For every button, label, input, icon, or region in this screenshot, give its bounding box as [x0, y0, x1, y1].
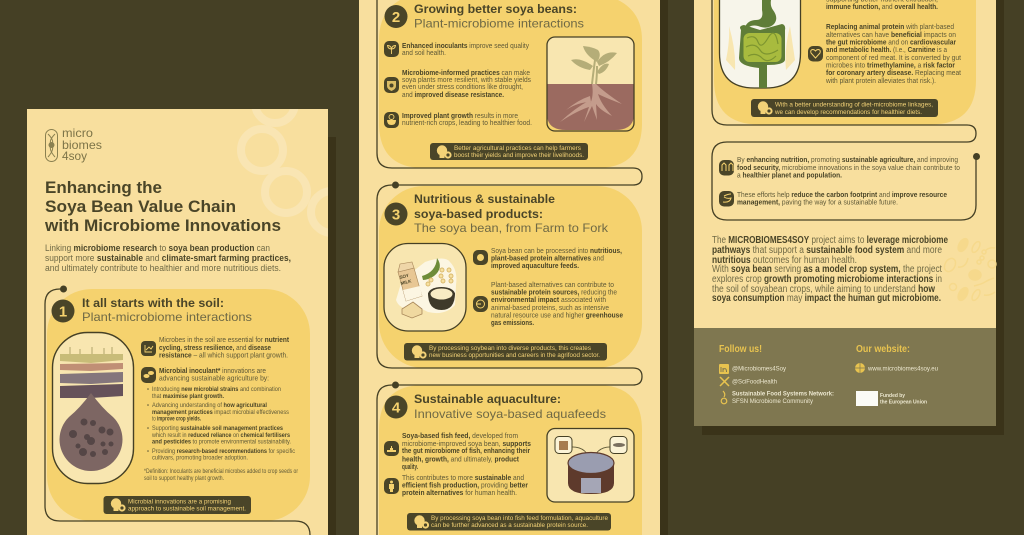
bullet list: Providing research-based recommendations for specific: [152, 448, 295, 455]
section 1 heading: It all starts with the soil:: [82, 296, 224, 310]
section 2 text: and soil health.: [402, 48, 446, 57]
section 3 heading: The soya bean, from Farm to Fork: [414, 221, 609, 235]
conclusion text: management, paving the way for a sustainable future.: [737, 198, 898, 206]
section 5 text: the gut microbiome and on cardiovascular: [826, 38, 956, 46]
section 3 text: [491, 246, 623, 327]
title: Enhancing the: [45, 178, 162, 197]
network text: Sustainable Food Systems Network:: [732, 390, 834, 398]
logo: biomes: [62, 138, 102, 152]
title: with Microbiome Innovations: [44, 216, 281, 235]
icon: knot: [721, 391, 727, 404]
section 3 text: animal-based proteins, such as intensive: [491, 303, 609, 312]
icon: linkedin: [719, 364, 729, 374]
section 2 text: Enhanced inoculants improve seed quality: [402, 41, 529, 50]
section 2 text: and improved disease resistance.: [402, 90, 504, 99]
section 3 text: plant-based protein alternatives and: [491, 254, 604, 262]
section 1 text: Microbial inoculant* innovations are: [159, 366, 266, 375]
image: soy products: [384, 244, 466, 331]
callout 5: we can develop recommendations for healthier diets.: [774, 109, 922, 116]
image: fish tank: [547, 428, 634, 502]
project description: explores crop growth promoting microbiome interactions in: [712, 274, 942, 285]
callout 1: [104, 496, 251, 514]
section 2 text: even under stress conditions like drought,: [402, 82, 523, 91]
section 1 heading: Plant-microbiome interactions: [82, 310, 252, 324]
section 2 text: Improved plant growth results in more: [402, 111, 518, 120]
x handle: @SciFoodHealth: [732, 378, 777, 386]
network text: SFSN Microbiome Community: [732, 398, 814, 405]
footnote: *Definition: Inoculants are beneficial microbes added to crop seeds or: [144, 469, 298, 475]
section 3 heading: soya-based products:: [414, 207, 543, 221]
section 2 text: [402, 41, 532, 127]
section 2 text: soya plants more resilient, with stable yields: [402, 75, 531, 84]
bullet list: Advancing understanding of how agricultural: [152, 402, 267, 409]
logo: 4soy: [62, 149, 87, 163]
badge 1: [52, 300, 74, 322]
callout 2: Better agricultural practices can help farmers: [454, 145, 582, 152]
panel: left poster: [27, 109, 328, 535]
section 4 text: the gut microbiome of fish, enhancing their: [402, 446, 530, 455]
project description: soya consumption may impact the human gut microbiome.: [712, 293, 941, 304]
panel: middle poster: [359, 0, 660, 535]
section 3 text: improved aquaculture feeds.: [491, 261, 579, 270]
section 3 text: gas emissions.: [491, 318, 534, 327]
funding text: Funded by: [880, 393, 905, 399]
callout 2: boost their yields and improve their livelihoods.: [454, 152, 584, 159]
badge 1: 1: [59, 304, 67, 320]
conclusion text: These efforts help reduce the carbon footprint and improve resource: [737, 190, 947, 199]
callout 5: [751, 99, 938, 117]
title: [44, 178, 281, 235]
section 3 heading: Nutritious & sustainable: [414, 192, 555, 206]
section 4 text: quality.: [402, 462, 418, 471]
section 3 text: environmental impact associated with: [491, 295, 606, 304]
section 5 text: with plant protein alleviates that risk.).: [825, 76, 936, 85]
project description: the soil of soyabean crops, while aiming to understand how: [712, 284, 935, 295]
icons conclusion: [719, 160, 734, 206]
section 2 text: nutrient-rich crops, leading to healthier food.: [402, 118, 532, 127]
section 3 text: natural resource use and higher greenhouse: [491, 310, 623, 320]
section 5 text: [825, 0, 962, 85]
section 5 blob: [714, 0, 976, 124]
callout 3: [404, 343, 607, 360]
section 1 text: [159, 335, 289, 382]
callout 3: By processing soybean into diverse products, this creates: [429, 345, 592, 352]
project description: The MICROBIOMES4SOY project aims to leverage microbiome: [712, 235, 948, 246]
image: soya plant: [547, 37, 634, 131]
section 5 text: component of red meat. It is converted by gut: [826, 53, 962, 62]
badge 3: [384, 202, 408, 226]
icon: chart: [141, 341, 156, 356]
title: Soya Bean Value Chain: [45, 197, 236, 216]
section 3 text: sustainable protein sources, reducing the: [491, 288, 617, 296]
section 5 text: and metabolic health. (I.e., Carnitine is a: [826, 45, 948, 54]
intro text: [45, 243, 291, 274]
section 1 heading: [82, 296, 252, 324]
panel: right poster: [694, 0, 996, 426]
section 4 text: health, growth, and ultimately, product: [402, 454, 519, 464]
callout 1: Microbial innovations are a promising: [128, 498, 231, 506]
bullet list: and pesticides to promote environmental sustainability.: [152, 438, 291, 446]
footer band: [694, 328, 996, 426]
network text: [732, 390, 834, 405]
bullet list: which result in reduced reliance on chemical fertilisers: [151, 432, 290, 439]
section 2 heading: [414, 2, 584, 30]
bullet list: Introducing new microbial strains and combination: [152, 386, 281, 393]
bullet list: [147, 386, 295, 462]
badge 2: [384, 5, 408, 28]
section 3 text: Soya bean can be processed into nutritious,: [491, 246, 622, 255]
project description: [712, 235, 948, 304]
EU flag: [856, 391, 878, 406]
section 5 text: for coronary artery disease. Replacing meat: [826, 68, 962, 77]
image: soy products: MILK: [400, 278, 413, 286]
funding text: the European Union: [880, 400, 927, 406]
section blobs: [379, 0, 642, 535]
icons section 4: [384, 441, 399, 494]
section 4 text: [402, 431, 531, 497]
connector line 1: [45, 286, 310, 535]
section 5 text: immune function, and overall health.: [826, 2, 938, 11]
badge 3: 3: [392, 206, 400, 224]
badge 4: 4: [392, 400, 401, 416]
intro text: support more sustainable and climate-smart farming practices,: [45, 253, 291, 264]
section 1 text: cycling, stress resilience, and disease: [159, 343, 271, 352]
logo: micro: [62, 126, 93, 140]
bullet list: management practices impact microbial effectiveness: [152, 409, 289, 416]
section 1 text: advancing sustainable agriculture by:: [159, 374, 269, 382]
intro text: Linking microbiome research to soya bean production can: [45, 243, 270, 254]
section 5 text: microbes into trimethylamine, a risk factor: [826, 60, 955, 70]
section 2 heading: Growing better soya beans:: [414, 2, 577, 16]
funding text: [880, 393, 927, 406]
follow us heading: Follow us!: [719, 343, 762, 355]
badge 4: [384, 396, 408, 418]
image: soil capsule: [52, 332, 134, 484]
section 4 text: This contributes to more sustainable and: [402, 473, 524, 482]
conclusion text: [737, 155, 960, 206]
conclusion text: a healthier planet and population.: [737, 170, 842, 180]
section 1 text: Microbes in the soil are essential for nutrient: [159, 335, 289, 344]
image: gut: [720, 0, 800, 88]
bullet list: that maximise plant growth.: [152, 393, 224, 400]
section 3 heading: [414, 192, 609, 235]
website url: www.microbiomes4soy.eu: [867, 366, 938, 372]
panel shadows: [328, 0, 1004, 535]
callout 3: new business opportunities and careers in the agrifood sector.: [429, 352, 600, 359]
project description: With soya bean serving as a model crop system, the project: [712, 264, 942, 275]
linkedin handle: @Microbiomes4Soy: [732, 366, 787, 372]
bullet list: cultivars, promoting broader adoption.: [152, 454, 248, 462]
icon: globe: [855, 363, 865, 373]
conclusion text: food security, microbiome innovations in the soya value chain contribute to: [737, 163, 960, 172]
callout 2: [430, 143, 588, 160]
section 5 text: Replacing animal protein with plant-based: [826, 22, 954, 31]
project description: pathways that support a sustainable food system and more: [712, 245, 942, 256]
project description: nutritious outcomes for human health.: [712, 255, 857, 266]
conclusion text: By enhancing nutrition, promoting sustainable agriculture, and improving: [737, 155, 958, 164]
callout 5: With a better understanding of diet-microbiome linkages,: [775, 102, 933, 108]
section 1 text: resistance – all which support plant growth.: [159, 350, 288, 360]
image: soy products: SOY: [399, 273, 409, 280]
icon: heart: [808, 46, 823, 62]
badge 2: 2: [392, 9, 400, 26]
callout 4: [407, 513, 611, 530]
footnote: [144, 469, 298, 482]
section 2 heading: Plant-microbiome interactions: [414, 16, 584, 30]
section 4 heading: [414, 392, 606, 421]
section 1 blob: [47, 289, 310, 521]
section 5 text: alternatives can have beneficial impacts on: [826, 30, 956, 39]
section 3 text: Plant-based alternatives can contribute to: [491, 280, 614, 289]
section 4 heading: Sustainable aquaculture:: [414, 392, 561, 406]
website heading: Our website:: [856, 343, 910, 355]
callout 4: can be further advanced as a sustainable protein source.: [431, 522, 588, 529]
decorative rings: [237, 109, 328, 236]
footnote: soil to support healthy plant growth.: [144, 476, 224, 482]
bullet list: Supporting sustainable soil management practices: [152, 425, 283, 432]
section 4 text: microbiome-improved soya bean, supports: [402, 439, 531, 448]
callout 1: approach to sustainable soil management.: [128, 506, 246, 512]
decorative microbes: [942, 237, 996, 302]
section 4 heading: Innovative soya-based aquafeeds: [414, 407, 606, 421]
icons section 2: [384, 41, 399, 128]
logo: [46, 126, 102, 163]
section 4 text: efficient fish production, providing better: [402, 480, 528, 490]
section 4 text: Soya-based fish feed, developed from: [402, 431, 518, 440]
callout 4: By processing soya bean into fish feed formulation, aquaculture: [431, 515, 608, 522]
bullet list: to improve crop yields.: [152, 416, 201, 422]
intro text: and ultimately contribute to healthier and more nutritious diets.: [45, 263, 281, 274]
section 2 text: Microbiome-informed practices can make: [402, 68, 530, 77]
connector line 2: [377, 0, 642, 535]
icon: X: [720, 377, 729, 386]
icons section 3: [473, 250, 488, 312]
icon: inoculant: [141, 367, 156, 383]
connector line 3: [712, 0, 980, 220]
section 4 text: protein alternatives for human health.: [402, 488, 517, 497]
